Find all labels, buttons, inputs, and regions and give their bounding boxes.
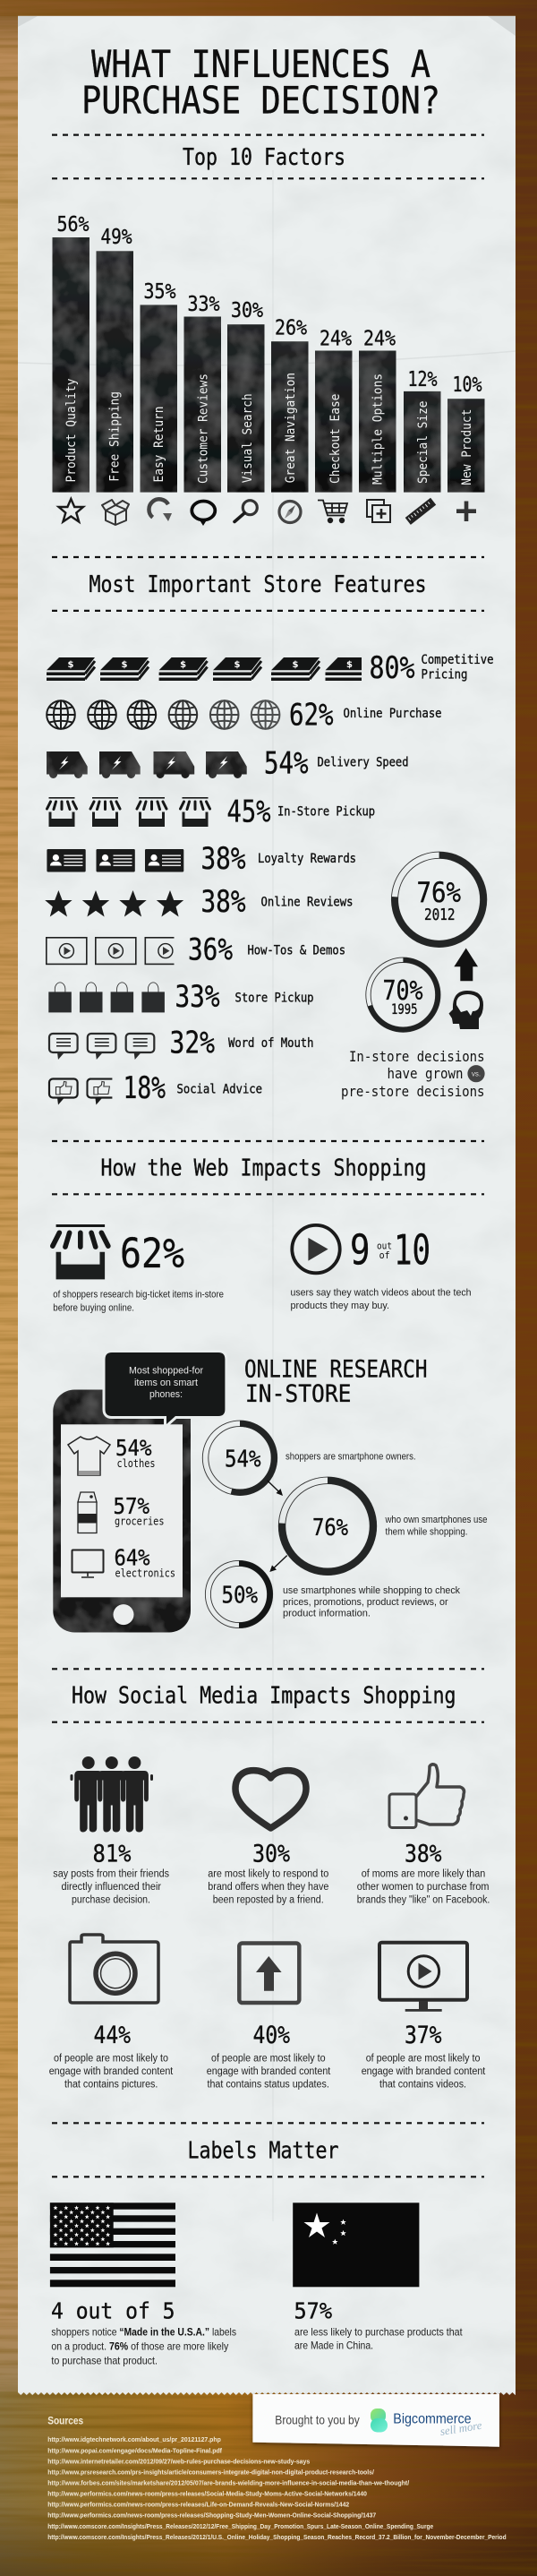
panel: usa label: shoppers notice “Made in the U.S.A.” labels: [51, 2325, 236, 2338]
icon: camera: [70, 1935, 158, 2003]
row: delivery speed: Delivery Speed: [317, 756, 408, 770]
item: clothes: clothes: [116, 1456, 156, 1470]
bar values: 56%: [57, 213, 90, 236]
icon: usa flag: [50, 2202, 175, 2287]
row: online reviews: [45, 884, 353, 919]
phone body: [53, 1390, 191, 1632]
title: PURCHASE DECISION?: [81, 79, 440, 122]
icon: monitor with play: [379, 1943, 467, 2012]
row: word of mouth: Word of Mouth: [228, 1036, 313, 1051]
stat: 30 percent reposted offers: 30%: [252, 1840, 290, 1868]
panel: usa label: on a product. 76% of those are more likely: [51, 2340, 228, 2352]
ring: 50 percent check prices: [205, 1560, 460, 1628]
heading: labels matter: Labels Matter: [188, 2137, 338, 2164]
sponsor tag: Bigcommerce: [393, 2412, 472, 2427]
icon: money stacks: $: [293, 660, 299, 670]
icon: money stacks: [47, 657, 374, 681]
source links: http://www.performics.com/news-room/press-releases/Shopping-Study-Men-Women-Online-Social-Shopping/1437: [47, 2513, 376, 2520]
stat: 62 percent research in-store: [53, 1224, 224, 1313]
row: online reviews: 38%: [200, 884, 245, 919]
stat: 37 percent videos: 37%: [405, 2022, 442, 2049]
bar chart: top 10 factors: [52, 213, 485, 493]
stat: 40 percent status updates: engage with branded content: [207, 2066, 331, 2077]
title: [81, 42, 440, 122]
stat: 40 percent status updates: [207, 1944, 331, 2091]
stat: 37 percent videos: [362, 1943, 486, 2091]
icon: three people: [70, 1756, 153, 1833]
bar values: 30%: [231, 299, 263, 322]
row: loyalty rewards: Loyalty Rewards: [258, 852, 356, 866]
icon: cards: [47, 849, 183, 872]
icon: thumbs up bubbles: [49, 1078, 115, 1105]
stat: 38 percent moms facebook: other women to purchase from: [357, 1882, 489, 1893]
icon: cart: [318, 500, 347, 522]
item: clothes: [68, 1435, 156, 1475]
sources: [47, 2415, 507, 2541]
bar values: 12%: [408, 368, 438, 391]
row: competitive pricing: [47, 650, 494, 685]
bars: [52, 237, 485, 493]
row: online reviews: Online Reviews: [261, 895, 353, 909]
stat: 37 percent videos: engage with branded content: [362, 2066, 486, 2077]
heading: store features: Most Important Store Features: [90, 571, 426, 598]
bar labels: Great Navigation: [284, 373, 298, 483]
panel: china label: [293, 2202, 463, 2352]
heading: top 10 factors: Top 10 Factors: [183, 144, 345, 171]
stat: 40 percent status updates: 40%: [252, 2022, 290, 2049]
stat: 38 percent moms facebook: brands they "like" on Facebook.: [357, 1895, 490, 1906]
panel: usa label: [50, 2202, 236, 2366]
item: groceries: 57%: [113, 1493, 149, 1519]
stat: 9 out of 10 watch videos: 10: [394, 1226, 430, 1275]
heading: online research in-store: [244, 1356, 428, 1408]
panel: usa label: 4 out of 5: [51, 2298, 175, 2324]
row: how-tos and demos: 36%: [188, 932, 233, 967]
row: store pickup: Store Pickup: [234, 991, 313, 1005]
stat: 81 percent friends: say posts from their friends: [53, 1869, 169, 1880]
icon: play button: [292, 1225, 340, 1273]
row: loyalty rewards: [47, 841, 356, 876]
row: online purchase: 62%: [289, 697, 333, 732]
item: clothes: 54%: [115, 1435, 152, 1461]
item: electronics: electronics: [115, 1567, 175, 1580]
panel: china label: are less likely to purchase products that: [294, 2325, 463, 2338]
stat: 30 percent reposted offers: [208, 1771, 328, 1906]
sponsor tag: [252, 2394, 499, 2447]
panel: in-store decisions growth: [341, 852, 487, 1100]
ring: 54 percent smartphone owners: 54%: [225, 1447, 261, 1473]
icon: money stacks: $: [180, 660, 186, 670]
icon: heart: [235, 1771, 306, 1828]
bar labels: Special Size: [416, 401, 430, 484]
stat: 9 out of 10 watch videos: [290, 1225, 471, 1311]
source links: http://www.comscore.com/Insights/Press_Releases/2012/12/Free_Shipping_Day_Promotion_Spurs_Late-Season_Online_Spending_Surge: [47, 2524, 433, 2530]
icon: thumbs up: [389, 1765, 464, 1827]
source links: http://www.internetretailer.com/2012/09/27/web-rules-purchase-decisions-new-study-says: [47, 2459, 310, 2465]
icon: copy plus: [367, 500, 390, 522]
icon: upload arrow: [239, 1944, 299, 2003]
stat: 81 percent friends: purchase decision.: [72, 1895, 150, 1906]
icon: video players: [47, 938, 185, 964]
ring: 70 percent 1995: 1995: [391, 1000, 417, 1018]
icon: search: [234, 501, 257, 521]
icon: large store: [53, 1224, 108, 1279]
row: word of mouth: 32%: [170, 1026, 215, 1060]
stat: 40 percent status updates: that contains status updates.: [208, 2080, 329, 2091]
row: competitive pricing: Competitive: [421, 653, 494, 667]
row: competitive pricing: 80%: [369, 650, 415, 685]
icon: money stacks: $: [346, 660, 353, 670]
bar values: 33%: [188, 293, 220, 316]
icon: money stacks: $: [234, 660, 241, 670]
heading: web impacts: How the Web Impacts Shopping: [100, 1155, 426, 1181]
source links: http://www.idgtechnetwork.com/about_us/pr_20121127.php: [47, 2437, 221, 2443]
stat: 44 percent pictures: [49, 1935, 174, 2091]
stat: 9 out of 10 watch videos: products they may buy.: [290, 1301, 389, 1311]
icon: globes: [47, 700, 279, 729]
bar labels: [64, 373, 474, 485]
stat: 62 percent research in-store: before buying online.: [53, 1302, 134, 1313]
source links: http://www.performics.com/news-room/press-releases/Social-Media-Study-Moms-Active-Social-Networks/1440: [47, 2492, 367, 2498]
stat: 9 out of 10 watch videos: of: [379, 1249, 390, 1261]
arrow: 76 to 50: [269, 1556, 287, 1572]
icon: speech bubble: [192, 502, 215, 526]
stat: 44 percent pictures: 44%: [93, 2022, 131, 2049]
badge: vs: [467, 1065, 485, 1082]
ring: 70 percent 1995: 70%: [383, 975, 422, 1007]
row: how-tos and demos: [47, 932, 345, 967]
stat: 62 percent research in-store: of shoppers research big-ticket items in-store: [53, 1290, 224, 1301]
text: in-store decisions caption: In-store decisions: [349, 1048, 485, 1065]
item: electronics: 64%: [115, 1544, 150, 1570]
source links: http://www.prsresearch.com/prs-insights/article/consumers-integrate-digital-non-digital-product-research-tools/: [47, 2469, 374, 2476]
icon: money stacks: $: [122, 660, 128, 670]
icon: return arrow: [149, 498, 172, 521]
stat: 9 out of 10 watch videos: users say they watch videos about the tech: [290, 1287, 471, 1298]
stat: 81 percent friends: directly influenced their: [61, 1882, 161, 1893]
icon: plus: [456, 502, 476, 521]
stat: 37 percent videos: of people are most likely to: [366, 2054, 480, 2065]
bar labels: Multiple Options: [371, 374, 386, 485]
row: in-store pickup: In-Store Pickup: [277, 804, 375, 819]
sponsor tag: Brought to you by: [275, 2413, 360, 2427]
row: how-tos and demos: How-Tos & Demos: [247, 943, 345, 957]
panel: usa label: to purchase that product.: [51, 2354, 158, 2366]
icon: trucks: [47, 751, 247, 778]
factor icons row: [59, 498, 476, 526]
ring: 76 percent use while shopping: who own smartphones use: [385, 1515, 487, 1525]
row: delivery speed: [47, 745, 408, 780]
row: social advice: Social Advice: [177, 1083, 262, 1097]
stat: 30 percent reposted offers: are most likely to respond to: [208, 1869, 328, 1880]
stat: 81 percent friends: 81%: [93, 1840, 132, 1868]
icon: china flag: [293, 2202, 419, 2287]
icon: up arrow: [454, 948, 478, 981]
heading: social media impacts: How Social Media Impacts Shopping: [72, 1683, 456, 1710]
sponsor tag: sell more: [439, 2418, 483, 2438]
icon: speech bubbles: [49, 1034, 154, 1060]
ring: 54 percent smartphone owners: [202, 1421, 416, 1496]
text: in-store decisions caption: pre-store decisions: [341, 1083, 485, 1100]
badge: vs: vs.: [472, 1069, 481, 1078]
stat: 44 percent pictures: of people are most likely to: [54, 2054, 168, 2065]
stat: 81 percent friends: [53, 1756, 169, 1906]
stat: 38 percent moms facebook: [357, 1765, 490, 1906]
row: store pickup: [48, 979, 314, 1014]
stat: 30 percent reposted offers: brand offers when they have: [208, 1882, 328, 1893]
item: groceries: groceries: [115, 1515, 165, 1528]
panel: china label: are Made in China.: [294, 2340, 373, 2352]
title: WHAT INFLUENCES A: [91, 42, 430, 86]
stat: 40 percent status updates: of people are most likely to: [211, 2054, 326, 2065]
text: in-store decisions caption: [341, 1048, 485, 1100]
bar labels: New Product: [460, 409, 474, 485]
icon: money stacks: $: [68, 660, 74, 670]
stat: 38 percent moms facebook: 38%: [405, 1840, 442, 1868]
ring: 50 percent check prices: prices, promotions, product reviews, or: [283, 1597, 448, 1608]
bar labels: Checkout Ease: [328, 394, 343, 484]
panel: smartphone with shopped-for items: [53, 1352, 225, 1632]
icon: box: [102, 500, 129, 525]
row: store pickup: 33%: [175, 979, 220, 1014]
ring: 76 percent use while shopping: [278, 1477, 487, 1576]
row: online purchase: Online Purchase: [344, 707, 442, 721]
bar values: 24%: [363, 328, 396, 351]
source links: http://www.comscore.com/Insights/Press_Releases/2012/1/U.S._Online_Holiday_Shopping_Season_Reaches_Record_37.2_Billion_for_November-December_Period: [47, 2535, 507, 2541]
ring: 50 percent check prices: product information.: [283, 1609, 371, 1619]
row: social advice: 18%: [124, 1070, 166, 1105]
bar labels: Visual Search: [241, 393, 255, 483]
icon: star: [59, 499, 83, 521]
phone screen: [61, 1424, 183, 1597]
bar labels: Free Shipping: [107, 391, 122, 482]
callout bubble: items on smart: [134, 1378, 198, 1388]
heading: online research in-store: ONLINE RESEARCH: [244, 1356, 428, 1384]
icon: compass: [279, 502, 301, 523]
row: social advice: [49, 1070, 262, 1105]
logo mark: [371, 2409, 388, 2433]
ring: 76 percent 2012: 76%: [417, 877, 461, 909]
sources heading: Sources: [47, 2415, 83, 2427]
row: word of mouth: [49, 1026, 313, 1060]
source links: http://www.performics.com/news-room/press-releases/Life-on-Demand-Reveals-New-Social-Norms/1442: [47, 2503, 349, 2509]
phone home button: [113, 1604, 134, 1625]
bar values: 26%: [275, 317, 307, 340]
ring: 76 percent 2012: [391, 852, 487, 948]
stat: 44 percent pictures: engage with branded content: [49, 2066, 174, 2077]
source links: [47, 2437, 507, 2541]
ring: 76 percent use while shopping: them while shopping.: [385, 1526, 467, 1537]
bar values: 10%: [453, 374, 482, 397]
bar labels: Product Quality: [64, 378, 79, 482]
stat: 37 percent videos: that contains videos.: [379, 2080, 466, 2091]
row: online purchase: [47, 697, 441, 732]
callout bubble: phones:: [149, 1389, 183, 1400]
item: electronics: [72, 1544, 175, 1580]
ring: 50 percent check prices: use smartphones while shopping to check: [283, 1585, 460, 1596]
row: competitive pricing: Pricing: [421, 668, 467, 683]
heading: online research in-store: IN-STORE: [245, 1380, 351, 1408]
row: in-store pickup: [47, 794, 375, 829]
icon: bags: [48, 983, 165, 1012]
icon: stars: [45, 890, 183, 917]
arrow: 54 to 76: [267, 1481, 283, 1496]
panel: china label: 57%: [294, 2298, 332, 2324]
stat: 38 percent moms facebook: of moms are more likely than: [362, 1869, 485, 1880]
callout bubble: [106, 1352, 225, 1424]
bar values: [57, 213, 482, 397]
ring: 54 percent smartphone owners: shoppers are smartphone owners.: [286, 1451, 416, 1462]
row: delivery speed: 54%: [264, 745, 308, 780]
row: in-store pickup: 45%: [227, 794, 270, 829]
callout bubble: Most shopped-for: [129, 1366, 203, 1377]
bar values: 24%: [320, 328, 352, 351]
stat: 62 percent research in-store: 62%: [120, 1230, 184, 1277]
stat: 9 out of 10 watch videos: 9: [350, 1226, 371, 1275]
stat: 44 percent pictures: that contains pictures.: [64, 2080, 158, 2091]
stat: 9 out of 10 watch videos: out: [377, 1241, 392, 1252]
item: groceries: [78, 1492, 165, 1533]
icon: ruler: [405, 498, 436, 525]
bar labels: Easy Return: [152, 407, 166, 482]
source links: http://www.forbes.com/sites/marketshare/2012/05/07/are-brands-wielding-more-influence-in-social-media-than-we-thought/: [47, 2481, 409, 2487]
ring: 76 percent use while shopping: 76%: [312, 1515, 348, 1541]
bar values: 49%: [100, 226, 132, 249]
bar labels: Customer Reviews: [197, 374, 211, 484]
stat: 30 percent reposted offers: been reposted by a friend.: [213, 1895, 324, 1906]
ring: 76 percent 2012: 2012: [424, 906, 455, 924]
icon: head with brain: [449, 991, 483, 1029]
icon: stores: [47, 797, 209, 827]
bar values: 35%: [143, 280, 176, 304]
source links: http://www.popai.com/engage/docs/Media-Topline-Final.pdf: [47, 2448, 223, 2454]
row: loyalty rewards: 38%: [200, 841, 245, 876]
text: in-store decisions caption: have grown: [387, 1065, 464, 1082]
ring: 70 percent 1995: [366, 957, 440, 1032]
ring: 50 percent check prices: 50%: [222, 1583, 258, 1610]
